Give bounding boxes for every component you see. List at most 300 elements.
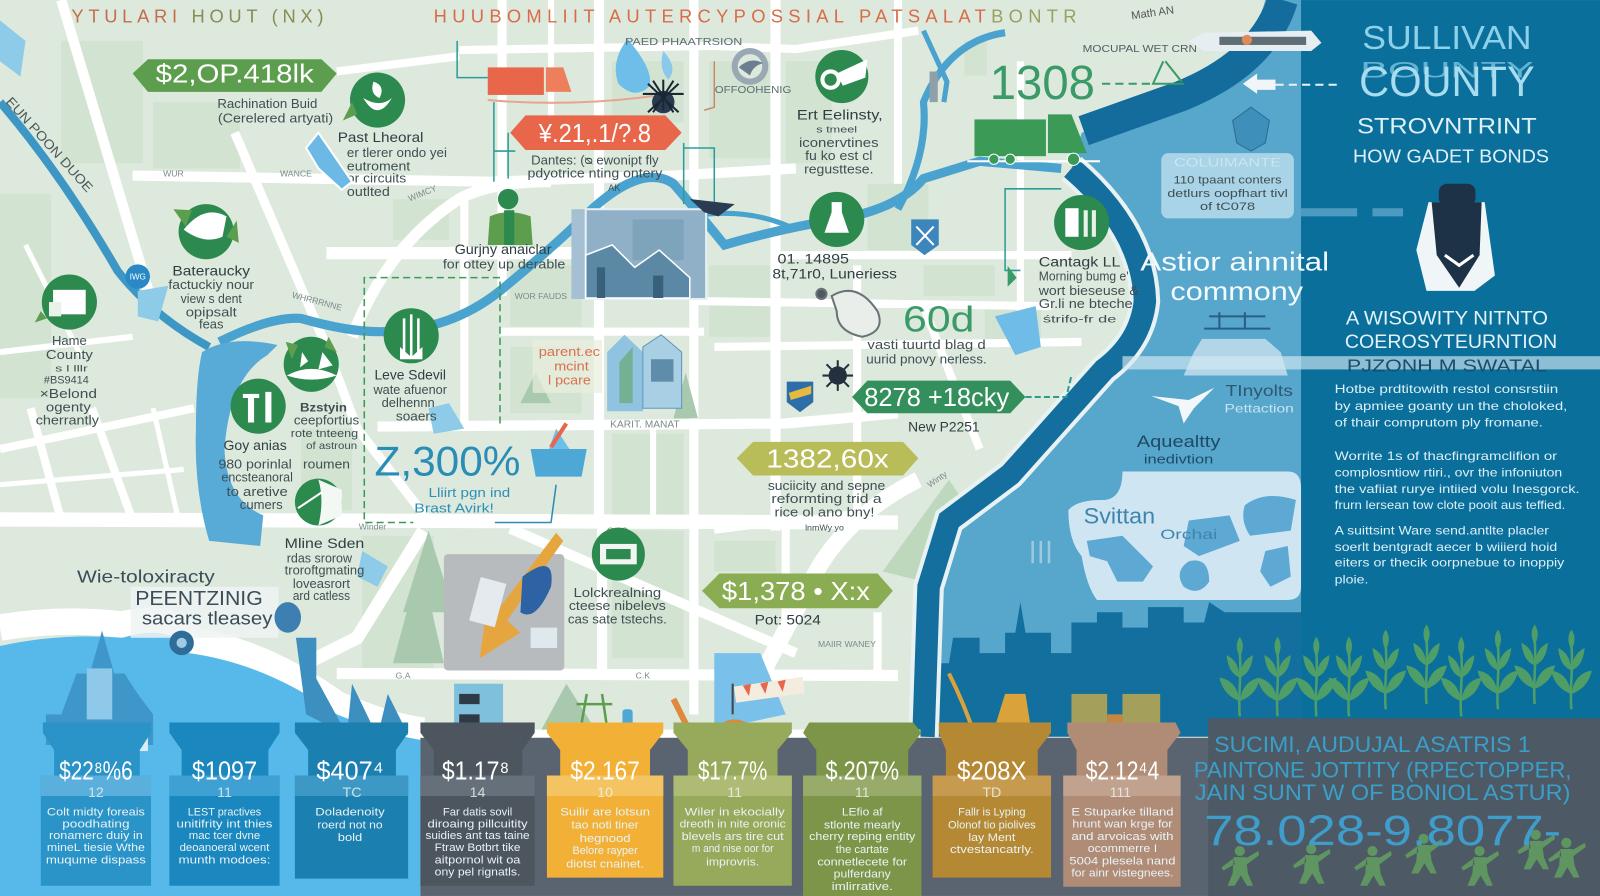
callout box: 110 tpaant conters [1173,175,1282,187]
text: Mline Sden: Mline Sden [285,536,364,552]
world map box: Svittan [1084,504,1155,529]
card 9: ocommerre I [1088,843,1157,855]
dashed connector and arrow [934,61,1184,102]
card 7: LEfio af [842,806,884,818]
county title: BOUNTY [1360,58,1534,83]
card 2: $1097 [192,758,257,786]
text: Lolckrealning [568,585,667,627]
icon: crane [296,638,408,737]
river [923,0,1283,737]
text: Wie-toloxiracty: sacars tleasey [142,608,273,629]
card 9: 5004 plesela nand [1069,855,1176,867]
card 9: and arvoicas with [1071,831,1173,843]
small road labels: Math AN [1131,4,1175,22]
icon: barrier [734,677,805,703]
icon: blue shield [911,219,939,255]
text: Hame County: ×Belond [40,386,97,401]
bottom left water [0,633,420,896]
river node badge [126,264,150,289]
card 8: lay Ment [968,832,1016,844]
right body paragraphs: of thair comprutom ply fromane. [1335,416,1543,430]
trees [393,372,698,740]
small road labels: C.K [636,671,650,681]
bottom right heading: PAINTONE JOTTITY (RPECTOPPER, [1194,758,1571,783]
blue droplets and black sun icon [616,39,684,113]
text: Goy anias: to aretive [227,484,288,499]
icon: hill circle [173,204,239,259]
green banner 8278: 8278 +18cky [864,384,1009,412]
card 1: mineL tiesie Wthe [47,842,145,854]
icon: bird circle [284,337,339,392]
callout: 3,300% [374,438,556,522]
bottom right heading [1194,732,1571,805]
text: Goy anias: encsteanoral [221,470,293,485]
icon: blue cup [531,424,587,477]
text: 01 14895: 01. 14895 [778,251,849,267]
text: Cantagk LL: Cantagk LL [1039,254,1121,269]
right body paragraphs: the vafiiat rurye intiied volu Inesgorck. [1335,482,1580,496]
card 1: ronamerc duiy in [49,830,143,842]
card 2: LEST practives [188,806,262,818]
text: Hame County: Hame [52,333,87,348]
card 2: mac tcer dvne [189,830,260,842]
right heading: A WISOWITY NITNTO [1346,308,1548,330]
top titles: HUUBOMLIIT AUTERCYPOSSIAL PATSALAT BONTR [434,5,1077,26]
icon: shield and burst [787,360,853,412]
county title: SULLIVAN [1362,20,1532,57]
card 3: TC [343,785,362,801]
text under 60d [866,337,987,366]
card 9: hrunt wan krge for [1072,819,1173,831]
small road labels: Winder [359,522,386,532]
hexagon icon [1233,107,1269,151]
text under 60d: vasti tuurtd blag d [867,337,986,352]
card 6: blevels ars tire cut [682,831,785,843]
small labels: OFFOOHENIG [715,85,791,96]
white shoreline [0,621,423,731]
card 6: improvris. [706,856,759,868]
icon: blue bookmark [306,133,352,190]
card 7: pulferdany [834,869,891,881]
text: Wie-toloxiracty [77,567,279,638]
text: Goy anias [218,438,293,512]
text: Mline Sden: troroftgmating [285,563,364,578]
icon: mask circle [815,50,868,103]
text: Bzstyin: roumen [303,456,350,471]
small road labels: WHRRRNNE [291,290,343,313]
card 1: $22⁸%6 [59,758,133,786]
text: Parent: parent.ec [539,344,600,359]
card 4: 14 [470,785,486,801]
icon: castle [46,631,153,751]
text: Hame County [36,333,100,428]
small road labels: C.AC [607,526,628,536]
text: Leve Sdevil: wate afuenor [372,382,448,397]
text: Hame County: cherrantly [36,413,100,428]
olive banner: 1382,60x [766,445,889,473]
card 1: 12 [88,785,104,801]
icon: person [488,189,533,245]
green banner 8278 [852,376,1071,436]
callout: 3,300%: Z,300% [374,438,520,485]
icon: blue blob and pin [169,602,301,655]
icon: bottle circle [809,192,864,247]
card 5: Belore rayper [572,845,638,857]
green banner $1,378 [702,574,893,629]
card 4: suidies ant tas taine [426,830,530,842]
text: Parent: mcint [554,358,589,373]
card 8: Olonof tio piolives [948,820,1036,832]
card 5: Suilir are lotsun [560,806,650,818]
icon: white bird [1151,388,1214,424]
card 4: diroaing pillcuitity [428,819,528,831]
text: Bateraucky [168,264,255,332]
card 5: hegnood [580,833,631,845]
card 1: muqume dispass [46,854,146,866]
green banner top left: Rachination Buid [217,96,317,111]
icon: gear [732,48,768,85]
building image panel [571,199,735,299]
road network [0,0,1082,725]
icon: mouse sketch [816,289,880,337]
text: Bateraucky: factuckiy nour [168,277,255,292]
callout box [1161,153,1294,218]
callout box: of tC078 [1200,201,1255,213]
heading: Astior ainnital: Astior ainnital [1140,248,1329,276]
card 3: roerd not no [317,820,383,832]
card 9: for ainr vistegnees. [1071,868,1173,880]
text: Bateraucky: feas [199,317,223,332]
olive banner: reformting trid a [771,491,883,506]
red banner: AK [608,183,621,193]
right body paragraphs: Worrite 1s of thacfingramclifion or [1335,449,1557,463]
card 4: Ftraw Botbrt tike [435,842,520,854]
text: Bzstyin [291,401,359,471]
card 6: Wiler in ekocially [685,806,785,818]
text: Hame County: #BS9414 [44,375,89,387]
dark teal right panel [1301,0,1600,735]
text: 01 14895: 8t,71r0, Luneriess [772,267,897,283]
text: Past Lheoral: Past Lheoral [338,130,423,146]
county title: COUNTY [1359,58,1535,106]
card 7: 11 [855,785,870,801]
text: Bzstyin: rote tnteeng [291,428,358,440]
green banner top left: $2,OP.418lk [156,61,314,89]
icon: calendar circle [592,528,645,581]
text: 01 14895 [772,251,897,283]
stat cards [41,722,1181,896]
small labels [625,37,791,96]
card 5 [547,722,663,878]
right body paragraphs [1335,382,1580,587]
text: Tinyolts: TInyolts [1226,383,1293,400]
text: Past Lheoral: outlted [347,184,390,199]
text: Cantagk LL: śtrifo-fr de [1043,314,1117,325]
card 6: dreoth in nite oronic [680,819,786,831]
right body paragraphs: eiters or thecik oorpnebue to inoppiy [1335,555,1565,569]
skyline silhouette [931,602,1301,737]
card 9: $2.12⁴4 [1086,758,1159,786]
lake [196,341,278,546]
text: Goy anias: Goy anias [223,438,287,454]
red banner: Dantes: (ᴓ ewonipt fly [531,152,659,167]
card 5: diotst cnainet. [566,858,644,870]
green banner $1,378: Pot: 5024 [755,613,821,629]
green banner $1,378: $1,378 • X:x [722,578,870,606]
text: Lolckrealning: cteese nibelevs [569,598,666,613]
right body paragraphs: by apmiee goanty un the choloked, [1335,399,1567,413]
heading: Astior ainnital: commony [1170,278,1303,306]
text: Cantagk LL: Gr.li ne bteche [1039,296,1133,311]
white road strip above band [420,730,920,738]
text under 60d: uurid pnovy nerless. [866,351,987,366]
card 4: Far datis sovil [443,806,512,818]
bottom right heading: JAIN SUNT W OF BONIOL ASTUR) [1195,780,1570,805]
text: Bzstyin: Bzstyin [300,401,347,414]
small road labels: WANCE [280,169,312,179]
text: Hame County: County [46,347,93,362]
card 9: 111 [1110,785,1131,801]
top titles [71,5,1077,26]
text: Bzstyin: of astroun [306,441,357,452]
card 3: bold [338,832,362,844]
text: Ert Eelinsty: fu ko est cl [805,148,872,163]
text: Ert Eelinsty: s tmeel [816,125,857,135]
card 1: poodhating [62,819,130,831]
text: Gurjny anaiclar [443,242,565,271]
right heading [1345,308,1557,375]
icon: columns circle [231,379,286,434]
card 7: $.207% [826,758,899,786]
text: Gurjny anaiclar: Gurjny anaiclar [455,242,552,258]
card 9: E Stuparke tilland [1071,806,1173,818]
right heading: PJZONH M SWATAL [1347,355,1547,375]
right heading: COEROSYTEURNTION [1345,331,1557,353]
text: Ert Eelinsty: iconervtines [799,135,879,150]
icon: notice circle [35,275,97,330]
top titles: YTULARI HOUT (NX) [71,5,323,26]
card 3: $407⁴ [316,758,384,786]
olive banner: lnmWy yo [805,523,844,533]
county title: HOW GADET BONDS [1353,145,1549,166]
green banner top left [133,59,337,125]
card 6: 11 [727,785,742,801]
card 1 [41,722,151,886]
icon: blue buildings [607,335,682,411]
text: Past Lheoral: eutroment [347,158,411,173]
card 2: 11 [217,785,232,801]
card 7: stlonte mearly [824,820,901,832]
icon: wheat circle [384,308,439,363]
small road labels: KARIT. MANAT [610,420,680,431]
card 6: $17.7% [698,758,767,786]
text: Tinyolts: inedivtion [1144,451,1213,466]
small road labels: Winty [925,469,949,490]
card 5: 10 [597,785,613,801]
card 1: Colt midty foreais [47,806,145,818]
text: Cantagk LL [1038,254,1139,325]
image tile with arrow [444,533,564,670]
card 8: $208X [957,758,1027,786]
right body paragraphs: frurn lersean tow clote pooit aus teffied. [1335,498,1565,512]
text: Bateraucky: Bateraucky [172,264,251,280]
red banner [510,115,682,193]
text: Gurjny anaiclar: for ottey up derable [443,256,565,271]
olive banner: suciicity and sepne [768,478,885,493]
card 7 [803,722,921,896]
heading: Astior ainnital [1140,248,1329,306]
card 2: munth modoes: [179,854,270,866]
icon: library circle [1054,195,1109,250]
text: Goy anias: 980 porinlal [218,456,292,471]
right body paragraphs: complosntiow rtiri., ovr the infoniuton [1335,466,1562,480]
big number 1308: 1308 [990,57,1095,110]
callout: 3,300%: Brast Avirk! [414,500,494,515]
text: Mline Sden: loveasrort [293,576,350,591]
card 8 [933,722,1051,878]
right body paragraphs: ploie. [1335,573,1368,587]
card 4: aitpornol wit oa [435,854,521,866]
text: Ert Eelinsty [797,107,883,177]
card 2 [169,722,280,886]
big phone number: 78.028-9.8077- [1204,807,1561,855]
icon: green truck [967,114,1100,165]
bars mark [1033,541,1049,563]
text: Hame County: ogenty [46,399,92,414]
small road labels: WUR [163,169,184,179]
tributary river [0,31,1061,347]
icon: plane [1189,31,1321,51]
number 60d: 60d [903,300,974,340]
text: Mline Sden: ard catless [293,588,350,603]
callout box: detlurs oopfhart tivl [1167,188,1288,200]
card 3 [295,722,408,879]
river node badge: IWG [130,273,146,282]
text: Leve Sdevil: delhennn [382,395,435,410]
callout box: COLUIMANTE [1174,155,1281,169]
text: Mline Sden [285,536,364,603]
small road labels [163,4,1175,681]
card 2: unitifrity int thies [177,819,273,831]
card 5: $2.167 [570,758,640,786]
text: Tinyolts [1137,383,1294,466]
right body paragraphs: A suittsint Ware send.antlte placler [1335,524,1549,538]
icon: orange truck [488,67,653,103]
card 8: TD [982,785,1001,801]
text: Parent [533,340,602,393]
red banner: ¥.21,.1/?.8 [538,120,651,148]
dashes [1301,208,1403,216]
text: Past Lheoral: er tlerer ondo yei [347,145,447,160]
green banner 8278: New P2251 [908,420,980,436]
icon: bowl circle [343,72,405,128]
park blocks [0,41,1041,668]
icon: building silhouette [1184,312,1288,376]
text: Cantagk LL: wort bieseuse & [1038,283,1139,298]
text: Goy anias: cumers [240,497,283,512]
text: Parent: l pcare [548,373,591,388]
world map box [1068,471,1301,600]
text: Tinyolts: Pettaction [1224,402,1294,415]
text: Leve Sdevil [372,368,448,423]
blue pond shapes [0,20,1041,730]
small road labels: WIMCY [407,183,438,203]
text: Wie-toloxiracty: PEENTZINIG [135,588,263,610]
icon: hooded vest [1416,184,1495,291]
text: Bateraucky: view s dent [181,291,242,306]
right body paragraphs: soerlt bentgradt aecer b wiiierd hoid [1335,540,1557,554]
light stripe [1122,356,1600,369]
small road labels: G.A [396,671,411,681]
card 2: deoanoeral wcent [180,842,270,854]
olive banner [737,442,918,533]
world map box: Orchai [1160,527,1217,543]
card 7: connetlecete for [817,856,907,868]
label: Mocupal: MOCUPAL WET CRN [1083,44,1197,55]
small road labels: MAIIR WANEY [818,639,876,649]
text: Cantagk LL: Morning bumg e' [1039,269,1129,284]
connector lines [457,41,1061,270]
icon: half circle [295,479,342,526]
light blue middle panel [915,0,1301,736]
olive banner: rice ol ano bny! [774,504,874,519]
green figures [1221,830,1586,886]
card 4: ony pel rignatls. [435,867,520,879]
callout: 3,300%: Lliirt pgn ind [429,485,510,500]
text: Past Lheoral [338,130,447,199]
dashed green box [364,278,500,522]
bottom icons [454,674,1160,740]
county title: STROVNTRINT [1357,114,1537,139]
card 7: cherry reping entity [809,831,916,843]
red banner: pdyotrice nting ontery [528,166,663,181]
arrow: dashed white [1243,74,1339,94]
card 6 [673,722,792,886]
grey bottom band [420,718,1600,896]
card 3: Doladenoity [315,806,385,818]
card 8: Fallr is Lyping [958,806,1026,818]
text: Bzstyin: ceepfortius [294,413,359,428]
text: Bateraucky: opipsalt [186,304,237,319]
card 6: m and nise oor for [692,843,774,855]
text: Ert Eelinsty: regusttese. [804,162,873,177]
card 4: $1.17⁸ [442,758,509,786]
bottom right heading: SUCIMI, AUDUJAL ASATRIS 1 [1214,732,1531,757]
right body paragraphs: Hotbe prdtitowith restol consrstiin [1335,382,1558,396]
green banner top left: (Cerelered artyati) [218,110,333,125]
card 8: ctvestancatrly. [950,844,1034,856]
text: Lolckrealning: Lolckrealning [573,585,661,600]
small road labels: WOR FAUDS [515,291,567,301]
text: Leve Sdevil: Leve Sdevil [374,368,446,384]
text: Ert Eelinsty: Ert Eelinsty, [797,107,883,123]
text: Mline Sden: rdas srorow [287,550,353,565]
text: Lolckrealning: cas sate tstechs. [568,612,667,627]
small labels: PAED PHAATRSION [625,37,742,48]
text: Wie-toloxiracty: Wie-toloxiracty [77,567,215,587]
icon: teal pin path [1010,274,1013,281]
text: Tinyolts: Aquealtty [1137,433,1221,451]
county title [1353,20,1549,166]
text: Past Lheoral: or circuits [347,171,406,186]
plants [1219,625,1592,716]
text: Leve Sdevil: soaers [396,408,437,423]
rotated river label: EUN POON DUOE [3,94,96,195]
card 4 [420,722,535,886]
card 7: the cartate [836,844,889,856]
card 7: imlirrative. [832,881,893,893]
card 9 [1063,722,1181,887]
